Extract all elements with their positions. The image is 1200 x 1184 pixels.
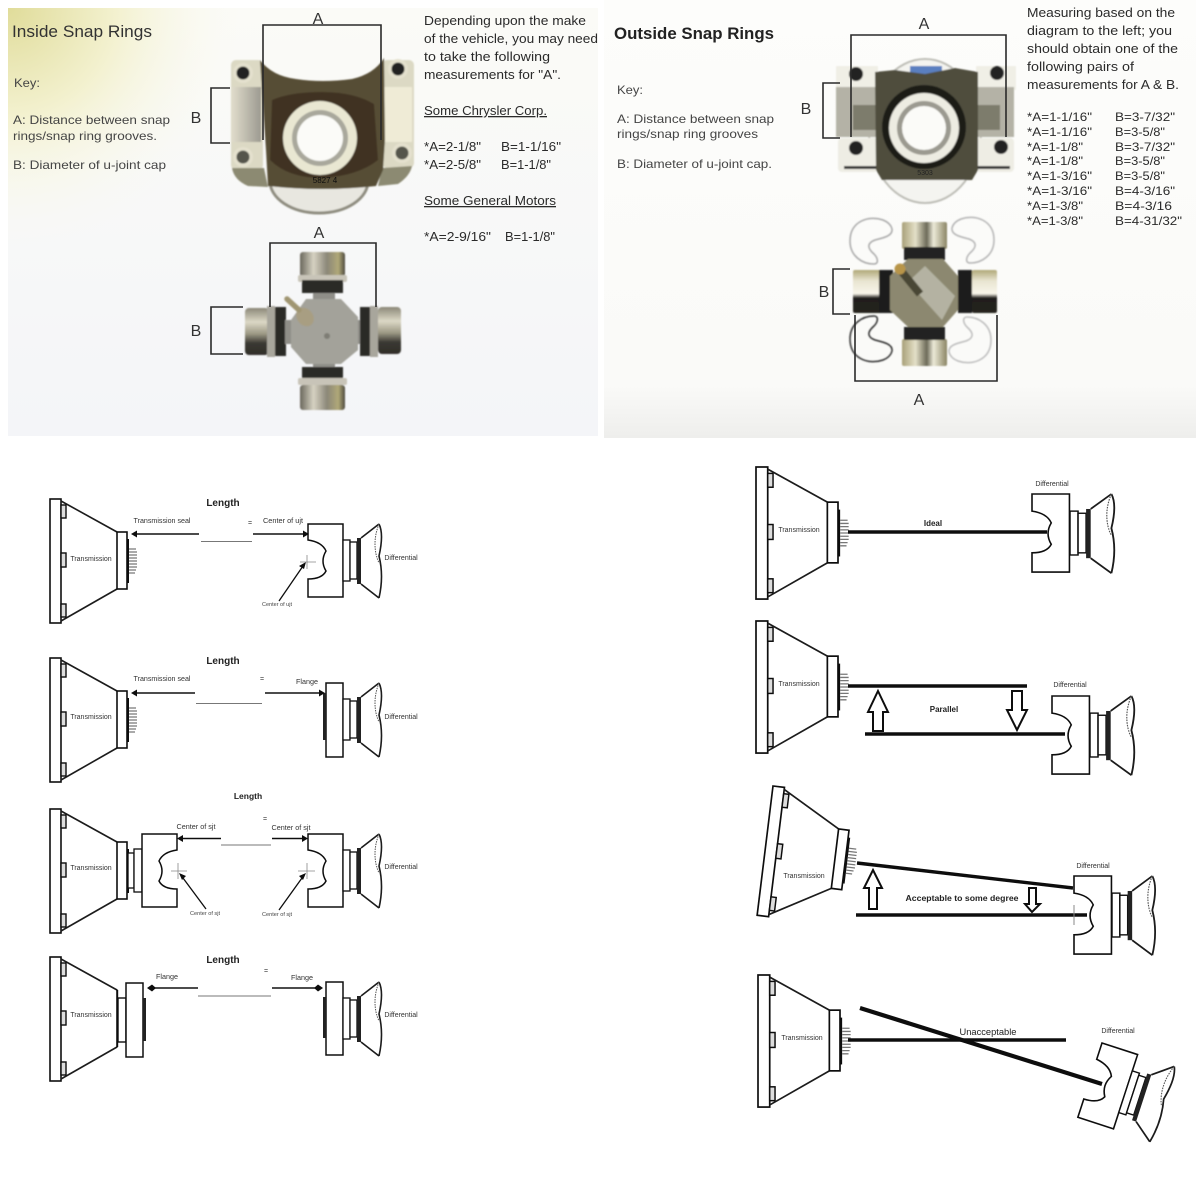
diagram: ideal alignment: Ideal xyxy=(924,519,942,528)
measurements text, inside snap rings: measurements for "A". xyxy=(424,67,561,82)
yoke photo, inside snap rings xyxy=(231,58,414,213)
key text, inside snap rings: B: Diameter of u-joint cap xyxy=(13,158,166,172)
dimension brackets, outside snap rings: B xyxy=(819,284,829,301)
measurements text, inside snap rings: Depending upon the make xyxy=(424,13,586,28)
diagram: length, transmission seal to flange: Transmission seal xyxy=(134,676,191,683)
diagram: length, center of u-joint to center of u-joint xyxy=(50,791,418,933)
diagram: length, transmission seal to flange: = xyxy=(260,676,264,683)
measurement pairs table xyxy=(1027,110,1182,228)
diagram: length, flange to flange: = xyxy=(264,968,268,975)
diagram: length, transmission seal to center of u-joint: Transmission xyxy=(70,556,112,563)
diagram: length, center of u-joint to center of u-joint: Center of sjt xyxy=(176,824,216,831)
diagram: parallel alignment: Parallel xyxy=(930,705,958,714)
diagram: length, transmission seal to center of u-joint: Differential xyxy=(384,555,418,562)
diagram: length, center of u-joint to center of u-joint: Length xyxy=(234,791,262,801)
measurement pairs table: B=4-3/16" xyxy=(1115,184,1175,198)
diagram: ideal alignment: Differential xyxy=(1035,481,1069,488)
key text, inside snap rings: Key: xyxy=(14,76,40,90)
key text, outside snap rings: Key: xyxy=(617,83,643,97)
diagram: length, center of u-joint to center of u-joint: Center of sjt xyxy=(262,912,292,918)
diagram: length, center of u-joint to center of u-joint: Center of sjt xyxy=(190,911,220,917)
diagram: acceptable to some degree: Acceptable to some degree xyxy=(906,894,1019,903)
dimension brackets, outside snap rings: A xyxy=(914,392,925,409)
diagram: length, transmission seal to flange: Differential xyxy=(384,714,418,721)
measurements text, outside snap rings: diagram to the left; you xyxy=(1027,23,1172,38)
measurements text, inside snap rings: B=1-1/8" xyxy=(505,229,555,244)
diagram: length, transmission seal to flange xyxy=(50,656,418,782)
diagram: acceptable to some degree xyxy=(757,786,1155,955)
measurement pairs table: *A=1-3/8" xyxy=(1027,214,1083,228)
diagram: length, center of u-joint to center of u-joint: = xyxy=(263,816,267,823)
diagram: unacceptable alignment: Transmission xyxy=(781,1035,823,1042)
dimension brackets, outside snap rings: A xyxy=(919,16,930,33)
diagram: parallel alignment: Transmission xyxy=(778,681,820,688)
diagram: length, center of u-joint to center of u-joint: Differential xyxy=(384,864,418,871)
measurements text, inside snap rings: of the vehicle, you may need xyxy=(424,31,598,46)
diagram: length, flange to flange: Length xyxy=(206,955,240,966)
diagram: length, center of u-joint to center of u-joint: Center of sjt xyxy=(272,825,311,832)
dimension brackets, inside snap rings: B xyxy=(191,110,201,127)
key text, outside snap rings xyxy=(617,83,774,171)
diagram: unacceptable alignment xyxy=(758,975,1177,1143)
dimension brackets, outside snap rings xyxy=(801,16,1006,409)
title: inside snap rings: Inside Snap Rings xyxy=(12,22,152,41)
measurements text, inside snap rings: Some General Motors xyxy=(424,193,557,208)
dimension brackets, inside snap rings xyxy=(191,11,381,354)
measurement pairs table: *A=1-1/16" xyxy=(1027,110,1092,124)
u-joint photo, inside snap rings xyxy=(245,252,401,410)
measurements text, inside snap rings: B=1-1/8" xyxy=(501,157,551,172)
measurement pairs table: *A=1-3/8" xyxy=(1027,199,1083,213)
panel: inside snap rings photo xyxy=(8,8,598,436)
dimension brackets, outside snap rings: B xyxy=(801,101,811,118)
diagram: length, center of u-joint to center of u-joint: Transmission xyxy=(70,865,112,872)
measurements text, inside snap rings: B=1-1/16" xyxy=(501,139,561,154)
measurements text, inside snap rings xyxy=(424,13,598,244)
key text, outside snap rings: B: Diameter of u-joint cap. xyxy=(617,157,772,171)
measurement pairs table: B=3-7/32" xyxy=(1115,140,1175,154)
diagram: length, transmission seal to center of u-joint: Length xyxy=(206,498,240,509)
yoke casting number: 5827 4 xyxy=(313,176,338,185)
diagram: unacceptable alignment: Unacceptable xyxy=(960,1027,1016,1037)
dimension brackets, inside snap rings: A xyxy=(314,225,325,242)
yoke casting number: 5303 xyxy=(917,170,933,177)
diagram: length, transmission seal to flange: Length xyxy=(206,656,240,667)
diagram: ideal alignment: Transmission xyxy=(778,527,820,534)
panel: outside snap rings photo xyxy=(604,0,1196,438)
diagram: length, transmission seal to flange: Flange xyxy=(296,679,318,686)
diagram: length, transmission seal to center of u-joint: = xyxy=(248,520,252,527)
diagram: unacceptable alignment: Differential xyxy=(1101,1028,1135,1035)
diagram: length, flange to flange xyxy=(50,955,418,1081)
measurements text, outside snap rings: measurements for A & B. xyxy=(1027,77,1179,92)
measurements text, inside snap rings: *A=2-1/8" xyxy=(424,139,481,154)
diagram: parallel alignment xyxy=(756,621,1134,775)
measurement pairs table: *A=1-3/16" xyxy=(1027,184,1092,198)
dimension brackets, inside snap rings: B xyxy=(191,323,201,340)
title: outside snap rings: Outside Snap Rings xyxy=(614,24,774,43)
measurement pairs table: B=3-7/32" xyxy=(1115,110,1175,124)
snap ring clips and u-joint photo xyxy=(850,217,997,366)
measurements text, inside snap rings: to take the following xyxy=(424,49,550,64)
diagram: parallel alignment: Differential xyxy=(1053,682,1087,689)
key text, outside snap rings: rings/snap ring grooves xyxy=(617,127,758,141)
diagram: length, transmission seal to center of u-joint: Center of ujt xyxy=(262,602,292,608)
measurements text, outside snap rings: following pairs of xyxy=(1027,59,1134,74)
measurement pairs table: B=3-5/8" xyxy=(1115,125,1165,139)
measurement pairs table: B=4-3/16 xyxy=(1115,199,1172,213)
measurement pairs table: B=3-5/8" xyxy=(1115,154,1165,168)
key text, outside snap rings: A: Distance between snap xyxy=(617,112,774,126)
measurements text, outside snap rings: Measuring based on the xyxy=(1027,5,1175,20)
key text, inside snap rings: A: Distance between snap xyxy=(13,113,170,127)
diagram: acceptable to some degree: Differential xyxy=(1076,863,1110,870)
measurement pairs table: *A=1-1/8" xyxy=(1027,140,1083,154)
diagram: length, flange to flange: Differential xyxy=(384,1012,418,1019)
dimension brackets, inside snap rings: A xyxy=(313,11,324,28)
measurement pairs table: *A=1-1/16" xyxy=(1027,125,1092,139)
measurements text, inside snap rings: Some Chrysler Corp. xyxy=(424,103,547,118)
diagram: acceptable to some degree: Transmission xyxy=(783,873,825,880)
diagram: length, transmission seal to center of u-joint: Center of ujt xyxy=(263,518,303,525)
measurement pairs table: *A=1-1/8" xyxy=(1027,154,1083,168)
diagram: length, transmission seal to flange: Transmission xyxy=(70,714,112,721)
measurement pairs table: B=4-31/32" xyxy=(1115,214,1182,228)
measurement pairs table: *A=1-3/16" xyxy=(1027,169,1092,183)
key text, inside snap rings xyxy=(13,76,170,172)
measurements text, outside snap rings xyxy=(1027,5,1179,92)
measurements text, inside snap rings: *A=2-9/16" xyxy=(424,229,491,244)
measurements text, outside snap rings: should obtain one of the xyxy=(1027,41,1178,56)
diagram: ideal alignment xyxy=(756,467,1114,599)
measurements text, inside snap rings: *A=2-5/8" xyxy=(424,157,481,172)
diagram: length, transmission seal to center of u-joint: Transmission seal xyxy=(134,518,191,525)
yoke photo, outside snap rings xyxy=(836,59,1016,203)
diagram: length, flange to flange: Flange xyxy=(156,974,178,981)
key text, inside snap rings: rings/snap ring grooves. xyxy=(13,129,157,143)
diagram: length, flange to flange: Flange xyxy=(291,975,313,982)
diagram: length, transmission seal to center of u-joint xyxy=(50,498,418,623)
measurement pairs table: B=3-5/8" xyxy=(1115,169,1165,183)
diagram: length, flange to flange: Transmission xyxy=(70,1012,112,1019)
